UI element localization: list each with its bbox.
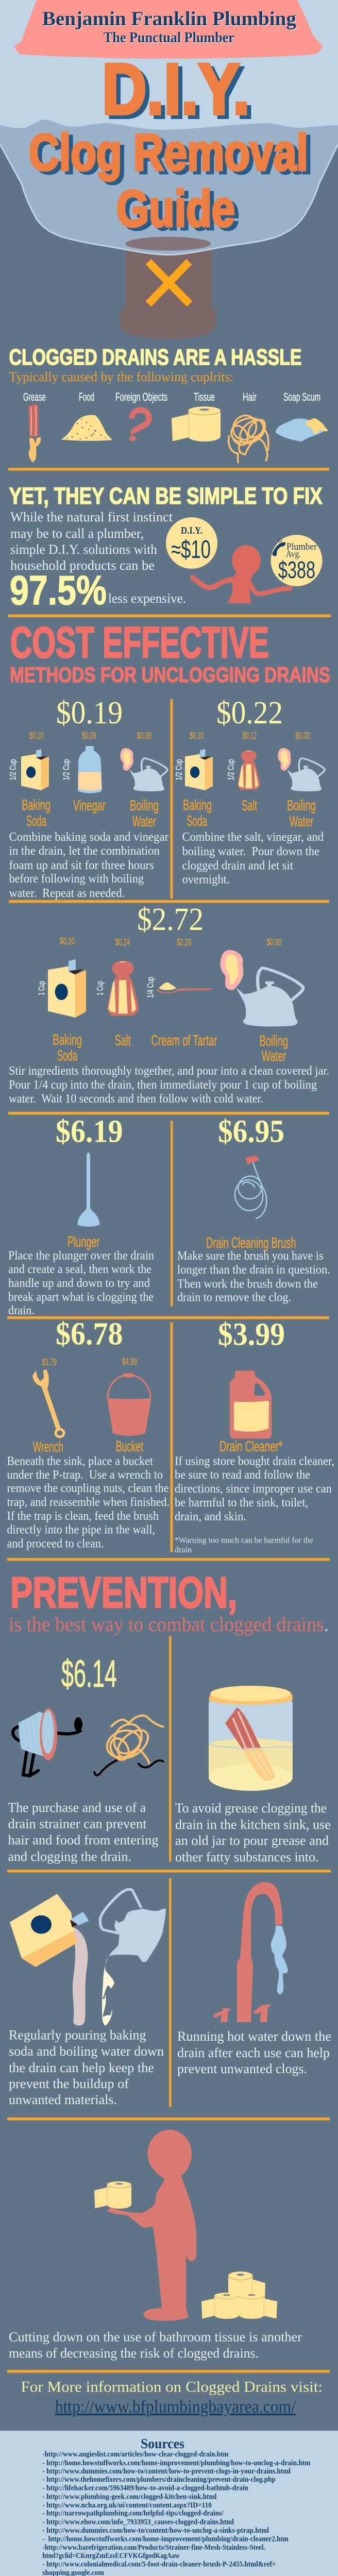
sink basin rim [0, 144, 338, 255]
instructions: longer than the drain in question. [177, 1263, 330, 1277]
instructions: Then work the brush down the [177, 1278, 318, 1291]
instructions: clogged drain and let sit [182, 859, 293, 873]
icon: measuring spoon [157, 982, 212, 993]
ingredient names [183, 797, 316, 830]
sources list: -http://www.barefrigeration.com/Products/Strainer-fine-Mesh-Stainless-Steel. [42, 2544, 265, 2552]
column divider [171, 1121, 173, 1307]
ingredient names: Boiling [287, 798, 316, 814]
advice text [9, 2330, 302, 2361]
ingredient names: Water [132, 814, 156, 830]
instructions: Combine baking soda and vinegar [9, 831, 168, 844]
text: less expensive: less expensive. [108, 591, 186, 606]
column divider [169, 1636, 172, 1862]
measure: 1 Cup [37, 981, 46, 995]
instructions: Place the plunger over the drain [8, 1249, 154, 1262]
price: $6.95 [218, 1114, 284, 1149]
paragraph: simple fix [10, 510, 173, 573]
instructions: be harmful to the sink, toilet, [175, 1496, 308, 1510]
divider [7, 1316, 329, 1319]
icon: salt shaker [107, 961, 139, 1016]
subheading: best way to combat clogged drains: is the best way to combat clogged drains. [9, 1613, 329, 1636]
ingredient prices: $0.10 [190, 731, 204, 741]
icon: vinegar bottle [78, 746, 102, 793]
icon: phone [273, 539, 285, 556]
sources list: - http://www.colonialmedical.com/5-foot-drain-cleaner-brush-P-2455.html&ref= [42, 2561, 276, 2569]
icon: tissue stack [201, 2272, 277, 2319]
ingredient prices [29, 731, 151, 741]
method: wrench and bucket [7, 1317, 170, 1551]
culprit labels: Food [79, 391, 94, 403]
instructions: water. Repeat as needed. [9, 887, 125, 900]
instructions [177, 1249, 330, 1304]
culprit labels: Grease [23, 391, 46, 403]
item prices: $4.99 [122, 1357, 137, 1367]
ingredient names: Water [290, 814, 313, 830]
column divider [170, 699, 173, 899]
instructions [175, 1455, 334, 1523]
ingredient prices: $0.20 [60, 936, 75, 946]
measure: 1 Cup [95, 981, 105, 995]
instructions: before following with boiling [9, 872, 144, 886]
instructions: and create a seal, then work the [8, 1263, 151, 1276]
icon: hair [228, 411, 269, 463]
price: $2.72 [137, 902, 204, 937]
title: D.I.Y.: D.I.Y. [106, 52, 254, 133]
paragraph: simple fix: While the natural first instinct [10, 510, 173, 524]
instructions: water. Wait 10 seconds and then follow with cold water. [9, 1092, 263, 1106]
callout: D.I.Y. cost: ≈$10 [171, 536, 211, 564]
advice text [175, 1801, 331, 1865]
method: plunger [8, 1114, 154, 1317]
sources heading: Sources [141, 2436, 184, 2451]
icon: grease bacon [28, 404, 41, 462]
instructions: under the P-trap. Use a wrench to [7, 1468, 163, 1482]
icon: bucket [107, 1374, 151, 1436]
advice text: drain in the kitchen sink, use [175, 1817, 331, 1832]
ingredient prices [190, 731, 310, 741]
ingredient names: Salt [242, 798, 257, 814]
instructions [9, 1064, 329, 1106]
price: $6.19 [56, 1114, 123, 1149]
icon: running hair [94, 1716, 164, 1775]
icon: faucet [213, 1882, 282, 2022]
prevention: person with tissue [9, 2130, 302, 2361]
icon: soap [276, 418, 328, 442]
measure: 1/2 Cup [61, 759, 71, 780]
sources list [42, 2450, 311, 2576]
advice text: soda and boiling water down [9, 2044, 164, 2059]
item prices [42, 1357, 137, 1367]
price: $3.99 [218, 1317, 285, 1352]
advice text [8, 1800, 159, 1864]
measure: 1/2 Cup [174, 759, 183, 780]
ingredient names: Soda [57, 1048, 77, 1064]
warning note: *Warning too much can be harmful for the [175, 1536, 313, 1545]
link: http://www.bfplumbingbayarea.com/ [55, 2397, 296, 2417]
instructions: If the trap is clean, feed the brush [7, 1510, 159, 1523]
ingredient prices: $0.00 [295, 731, 310, 741]
culprit labels [23, 391, 320, 403]
ingredient prices: $0.12 [243, 731, 257, 741]
icon: wrench [32, 1369, 64, 1437]
method: $2.72 [9, 902, 329, 1106]
ingredient names: Baking [183, 797, 212, 814]
instructions [182, 831, 324, 886]
instructions: remove the coupling nuts, clean the [7, 1482, 169, 1495]
icon: jar with grease [209, 1686, 293, 1791]
icon: kettle with steam [120, 748, 167, 791]
advice text: an old jar to pour grease and [175, 1833, 329, 1848]
ingredient names: Baking [53, 1032, 82, 1048]
method: drain cleaner [175, 1317, 334, 1554]
sources list: - http://narrowpathplumbing.com/helpful-tips/clogged-drains/ [42, 2510, 224, 2518]
instructions: break apart what is clogging the [8, 1291, 154, 1304]
instructions [7, 1455, 170, 1551]
ingredient names: Cream of Tartar [151, 1032, 217, 1049]
prevention: grease jar [175, 1686, 331, 1865]
ingredient names: Water [262, 1048, 286, 1064]
icon: question mark [129, 410, 149, 441]
instructions: drain, and skin. [175, 1510, 246, 1523]
callout: plumber cost: Plumber [286, 541, 317, 552]
sources list: html?gclid=CKnrgZmEzsECFVKGfgodKagAaw [42, 2552, 180, 2560]
advice text: To avoid grease clogging the [175, 1801, 327, 1816]
icon: baking soda box [48, 959, 86, 1018]
instructions: overnight. [182, 873, 230, 886]
header: company name: The Punctual Plumber [104, 30, 234, 46]
title: D.I.Y.: D.I.Y. [102, 48, 250, 129]
header: sky backdrop [0, 0, 338, 165]
icon: food pile [61, 415, 112, 441]
sources list: - http://lifehacker.com/5963489/how-to-avoid-a-clogged-bathtub-drain [42, 2484, 249, 2493]
column divider [170, 1322, 173, 1552]
icon: drain brush [231, 1156, 266, 1218]
header: company name: Benjamin Franklin Plumbing [42, 8, 297, 30]
instructions: Combine the salt, vinegar, and [182, 831, 324, 844]
measure: 1/4 Cup [145, 977, 156, 998]
instructions: handle up and down to try and [8, 1277, 150, 1290]
sources list: - http://www.plumbing-geek.com/clogged-kitchen-sink.html [42, 2493, 216, 2501]
name: Plunger [67, 1234, 100, 1250]
item prices: $1.79 [42, 1357, 57, 1367]
instructions [9, 831, 168, 900]
ingredient names: Salt [115, 1032, 131, 1049]
statistic: 97.5%: 97.5% [10, 567, 107, 613]
advice text [9, 2028, 164, 2107]
ingredient prices [60, 936, 281, 947]
advice text: hair and food from entering [8, 1833, 159, 1848]
instructions: in the drain, let the combination [9, 844, 160, 858]
sources list: - http://home.howstuffworks.com/home-improvement/plumbing/drain-cleaner2.htm [42, 2535, 289, 2544]
advice text: drain after each use can help [177, 2045, 330, 2060]
culprit labels: Tissue [194, 391, 215, 403]
paragraph: simple fix: simple D.I.Y. solutions with [10, 542, 157, 557]
title: Guide: Guide [116, 180, 235, 237]
sources list: - http://www.dummies.com/how-to/content/how-to-prevent-clogs-in-your-drains.html [42, 2467, 291, 2476]
callout: D.I.Y. cost: D.I.Y. [181, 525, 202, 536]
ingredient prices: $0.00 [137, 731, 151, 741]
price: $0.19 [56, 696, 123, 731]
ingredient names: Vinegar [73, 798, 106, 814]
sources list: -http://www.angieslist.com/articles/how-clear-clogged-drain.htm [42, 2450, 229, 2459]
advice text: prevent the buildup of [9, 2076, 129, 2091]
measure: 1/2 Cup [8, 759, 18, 780]
prevention: hot water [177, 1882, 331, 2076]
instructions: Make sure the brush you have is [177, 1249, 324, 1263]
icon: kettle with steam [278, 748, 325, 791]
ingredient names: Soda [26, 813, 46, 829]
header: company name: Benjamin Franklin Plumbing [43, 8, 297, 30]
sources list: - http://www.dummies.com/how-to/content/how-to-unclog-a-sinks-ptrap.html [42, 2527, 269, 2535]
ingredient names [22, 797, 159, 830]
icon: cleaner bottle [230, 1370, 272, 1438]
instructions: trap, and reassemble when finished. [7, 1496, 170, 1509]
name: Drain Cleaner* [219, 1438, 282, 1455]
ingredient prices: $0.00 [267, 937, 281, 947]
method: $0.22 [174, 696, 325, 886]
title: Guide: Guide [121, 183, 239, 240]
panel: sources [0, 2431, 338, 2576]
ingredient prices: $0.24 [115, 937, 130, 947]
advice text: the drain can help keep the [9, 2060, 154, 2075]
header: company name: The Punctual Plumber [104, 30, 235, 46]
instructions: and proceed to clean. [7, 1537, 104, 1551]
icon: plunger [77, 1153, 100, 1227]
instructions: boiling water. Pour down the [182, 845, 319, 858]
measure: 1/2 Cup [226, 759, 236, 780]
culprit labels: Hair [243, 391, 257, 403]
instructions: be sure to read and follow the [175, 1468, 310, 1482]
divider [9, 900, 329, 903]
icon: kettle with steam [220, 950, 303, 1026]
prevention: drain strainer [8, 1652, 164, 1864]
instructions: drain to remove the clog. [177, 1291, 291, 1304]
paragraph: simple fix: household products can be [10, 558, 155, 573]
culprit labels: Foreign Objects [115, 391, 167, 403]
ingredient names [53, 1032, 288, 1064]
ingredient names: Soda [187, 813, 208, 829]
method: $0.19 [8, 696, 168, 900]
instructions: drain. [8, 1304, 35, 1317]
icon: tissue in hand [94, 2181, 131, 2209]
names: Bucket [116, 1438, 143, 1455]
divider [7, 2117, 330, 2121]
instructions: directly into the pipe in the wall, [7, 1523, 155, 1536]
divider [8, 468, 329, 471]
header: pink banner [14, 0, 323, 59]
price: $6.78 [56, 1317, 123, 1352]
heading: prevention: PREVENTION, [10, 1568, 237, 1617]
advice text: Regularly pouring baking [9, 2028, 146, 2042]
ingredient names: Boiling [260, 1033, 288, 1049]
divider [8, 1112, 329, 1115]
advice text: means of decreasing the risk of clogged drains. [9, 2346, 259, 2361]
instructions: foam up and sit for three hours [9, 859, 154, 872]
callout: plumber cost [271, 535, 323, 586]
instructions: Beneath the sink, place a bucket [7, 1455, 153, 1468]
icon: strainer character [13, 1708, 82, 1776]
icon: baking soda box [21, 749, 49, 790]
drain opening [126, 237, 211, 250]
advice text: and clogging the drain. [8, 1849, 131, 1864]
icon: baking soda box [185, 749, 213, 790]
warning note [175, 1536, 313, 1554]
icon: pouring baking soda [10, 1894, 89, 2026]
ingredient names: Boiling [130, 798, 159, 814]
ingredient prices: $2.28 [177, 937, 191, 947]
divider [8, 614, 331, 617]
icon: pouring kettle [100, 1889, 166, 2026]
advice text: The purchase and use of a [8, 1800, 146, 1815]
advice text: other fatty substances into. [175, 1850, 318, 1865]
advice text: Cutting down on the use of bathroom tissue is another [9, 2330, 302, 2344]
callout: plumber cost: $388 [278, 556, 315, 583]
divider [7, 1558, 330, 1561]
column divider [169, 1878, 172, 2107]
sources list: - http://www.thehomefixers.com/plumbers/draincleaning/prevent-drain-clog.php [42, 2476, 276, 2484]
subheading: culprits: Typically caused by the following cuplrits: [9, 369, 234, 384]
names: Wrench [33, 1439, 63, 1455]
sink basin water [0, 120, 338, 255]
advice text: unwanted materials. [9, 2092, 117, 2107]
instructions: Pour 1/4 cup into the drain, then immediately pour 1 cup of boiling [9, 1078, 317, 1092]
header: company name [42, 8, 297, 46]
drain pipe [120, 240, 216, 339]
icon: salt shaker [238, 750, 260, 790]
prevention: baking soda and boiling water [9, 1889, 166, 2107]
callout: D.I.Y. cost [166, 517, 217, 569]
ingredient prices: $0.09 [82, 731, 96, 741]
call to action: For More information on Clogged Drains visit: [21, 2378, 323, 2396]
icon: shrugging person [191, 545, 292, 603]
icon: person silhouette [107, 2130, 196, 2321]
sources list: - http://home.howstuffworks.com/home-improvement/plumbing/how-to-unclog-a-drain.htm [42, 2459, 311, 2467]
instructions [8, 1249, 154, 1317]
divider [7, 2370, 330, 2373]
warning note: drain [175, 1546, 192, 1554]
icon: running water [271, 1926, 288, 1994]
callout: plumber cost: Avg. [286, 549, 301, 559]
ingredient prices: $0.10 [29, 731, 43, 741]
advice text [177, 2029, 331, 2076]
sources list: - http://www.ncha.org.uk/ui/content/content.aspx?ID=110 [42, 2501, 212, 2510]
price: $6.14 [61, 1652, 117, 1695]
ingredient names: Baking [22, 797, 50, 814]
names [33, 1438, 143, 1455]
advice text: prevent unwanted clogs. [177, 2061, 307, 2076]
advice text: drain strainer can prevent [8, 1817, 147, 1831]
icon: tissue roll [172, 406, 221, 442]
clog X mark [148, 262, 190, 304]
divider [7, 1870, 331, 1872]
paragraph: simple fix: may be to call a plumber, [10, 526, 144, 541]
sources list: - http://www.ehow.com/info_7933953_causes-clogged-drains.html [42, 2518, 234, 2526]
advice text: Running hot water down the [177, 2029, 331, 2044]
price: $0.22 [216, 696, 283, 731]
method: drain cleaning brush [177, 1114, 330, 1304]
